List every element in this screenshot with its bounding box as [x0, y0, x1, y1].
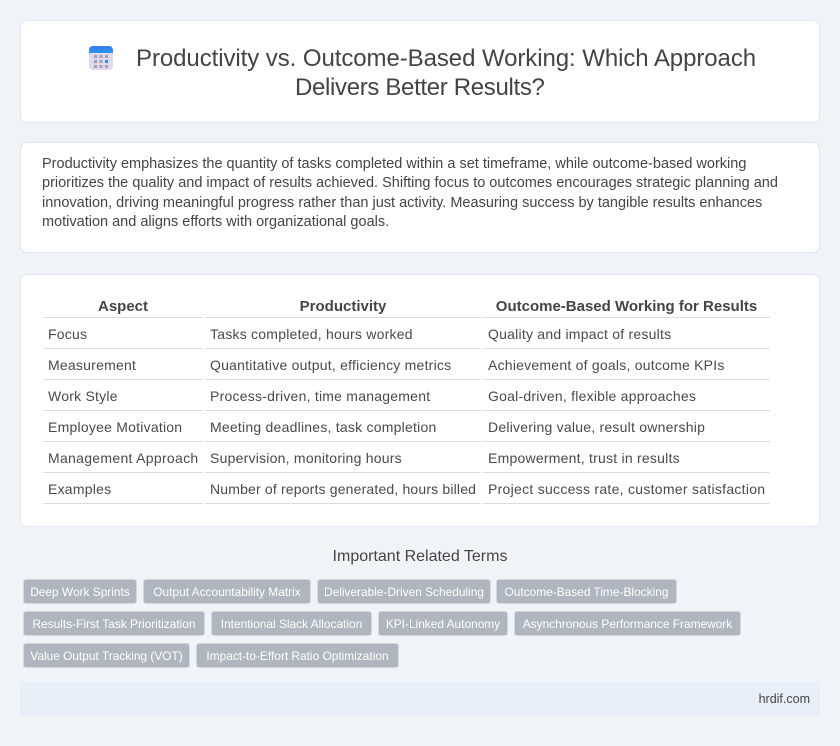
- row: work style: Work Style: [48, 388, 118, 404]
- table header: Outcome-Based Working for Results: [496, 298, 757, 315]
- summary text: [42, 156, 778, 230]
- related terms chips: Outcome-Based Time-Blocking: [505, 585, 668, 599]
- table: [43, 317, 770, 504]
- row: measurement: [48, 357, 725, 373]
- footer bar: [20, 682, 820, 716]
- related terms chips: [23, 579, 741, 668]
- panel: comparison table: [20, 274, 820, 527]
- row: employee motivation: Meeting deadlines, task completion: [210, 419, 437, 435]
- row: focus: [48, 326, 671, 342]
- title: Delivers Better Results?: [295, 74, 545, 101]
- row: measurement: Achievement of goals, outcome KPIs: [488, 357, 725, 373]
- table header: Aspect: [98, 298, 148, 315]
- row: employee motivation: Employee Motivation: [48, 419, 182, 435]
- row: examples: Number of reports generated, hours billed: [210, 481, 476, 497]
- table header: Productivity: [300, 298, 386, 315]
- related terms chips: Output Accountability Matrix: [153, 585, 301, 599]
- icon: calendar: [89, 46, 113, 70]
- row: focus: Tasks completed, hours worked: [210, 326, 413, 342]
- row: management approach: Empowerment, trust in results: [488, 450, 680, 466]
- row: measurement: Quantitative output, efficiency metrics: [210, 357, 451, 373]
- row: examples: Project success rate, customer satisfaction: [488, 481, 765, 497]
- related terms chips: Value Output Tracking (VOT): [30, 649, 183, 663]
- row: examples: [48, 481, 765, 497]
- summary text: motivation and aligns efforts with organizational goals.: [42, 214, 389, 230]
- row: examples: Examples: [48, 481, 111, 497]
- title: [136, 45, 756, 101]
- row: employee motivation: [48, 419, 705, 435]
- title: Productivity vs. Outcome-Based Working: Which Approach: [136, 45, 756, 72]
- header card: [20, 20, 820, 123]
- summary text: Productivity emphasizes the quantity of tasks completed within a set timeframe, while outcome-based working: [42, 156, 746, 172]
- row: management approach: [48, 450, 680, 466]
- related terms chips: Intentional Slack Allocation: [221, 617, 362, 631]
- related terms chips: Deep Work Sprints: [30, 585, 130, 599]
- related terms chips: Impact-to-Effort Ratio Optimization: [206, 649, 389, 663]
- related terms heading: Important Related Terms: [333, 548, 507, 565]
- related terms chips: Deliverable-Driven Scheduling: [324, 585, 484, 599]
- row: work style: Goal-driven, flexible approaches: [488, 388, 696, 404]
- row: measurement: Measurement: [48, 357, 136, 373]
- summary text: innovation, driving meaningful progress rather than just activity. Measuring success by tangible results enhances: [42, 194, 762, 210]
- footer text: hrdif.com: [759, 692, 810, 706]
- row: management approach: Supervision, monitoring hours: [210, 450, 402, 466]
- row: employee motivation: Delivering value, result ownership: [488, 419, 705, 435]
- table header: [98, 298, 757, 315]
- row: focus: Focus: [48, 326, 87, 342]
- row: focus: Quality and impact of results: [488, 326, 671, 342]
- row: management approach: Management Approach: [48, 450, 198, 466]
- related terms chips: KPI-Linked Autonomy: [386, 617, 500, 631]
- panel: summary: [20, 142, 820, 253]
- row: work style: Process-driven, time management: [210, 388, 430, 404]
- related terms chips: Results-First Task Prioritization: [32, 617, 195, 631]
- related terms chips: Asynchronous Performance Framework: [523, 617, 732, 631]
- row: work style: [48, 388, 696, 404]
- summary text: prioritizes the quality and impact of results achieved. Shifting focus to outcomes encourages strategic planning and: [42, 175, 778, 191]
